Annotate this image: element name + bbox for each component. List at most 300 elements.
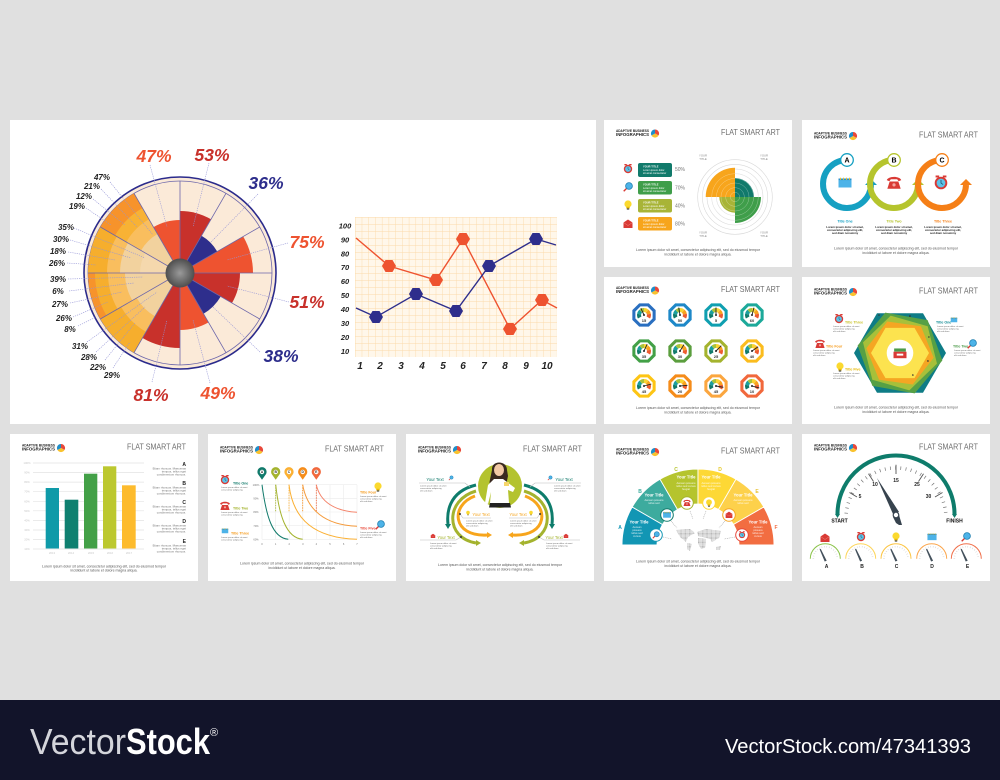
header: INFOGRAPHICS (814, 290, 847, 296)
caption: Lorem ipsum dolor sit amet, consectetur adipiscing elit, sed do eiusmod tempor (636, 560, 761, 564)
radial chart small labels: 18% (50, 247, 66, 256)
footer bar (0, 700, 1000, 780)
radial chart: TITLE (699, 234, 707, 238)
bars: 90% (24, 471, 30, 475)
segment text: tellus sed (738, 501, 749, 505)
bars: 2015 (88, 551, 95, 555)
title rows: YOUR TITLE (643, 182, 659, 186)
header (814, 442, 978, 452)
segment text: Aenean posuere (733, 498, 753, 502)
step titles and text: Lorem ipsum dolor sit amet, (924, 225, 962, 229)
arc C: C (939, 158, 945, 164)
right callouts: elit sed diam (360, 536, 372, 539)
callout text (420, 484, 581, 550)
caption: Lorem ipsum dolor sit amet, consectetur adipiscing elit, sed do eiusmod tempor (636, 248, 761, 252)
panel: octagon gauges (604, 277, 792, 424)
header: FLAT SMART ART (721, 127, 780, 137)
gauge grid: 60 (750, 318, 755, 323)
legend: tempus, tellus eget (162, 526, 186, 530)
header: FLAT SMART ART (127, 442, 186, 452)
header (22, 442, 186, 452)
radial chart small labels: 47% (93, 173, 110, 182)
bars: 2013 (49, 551, 56, 555)
radial chart small labels (48, 173, 120, 380)
caption: incididunt ut labore et dolore magna aliqua. (862, 251, 930, 255)
title rows: Lorem ipsum dolor (643, 168, 665, 172)
step titles and text: sed diam nonummy (881, 231, 908, 235)
curve chart: 7 (356, 542, 358, 546)
header: FLAT SMART ART (325, 444, 384, 454)
caption: incididunt ut labore et dolore magna aliqua. (268, 566, 336, 570)
header: INFOGRAPHICS (616, 289, 649, 294)
legend: tempus, tellus eget (162, 470, 186, 474)
segment text: tellus sed (753, 531, 764, 535)
title rows: 40% (675, 204, 686, 210)
legend: condimentum rhoncus. (157, 492, 186, 496)
radial chart small labels: 19% (69, 202, 85, 211)
curve chart: 90% (253, 496, 259, 500)
x axis labels: 10 (541, 361, 553, 372)
y axis labels: 50 (341, 291, 350, 300)
radial chart: YOUR (760, 154, 768, 158)
header: ADAPTIVE BUSINESS (616, 286, 649, 290)
callout text: Lorem ipsum dolor sit amet (466, 520, 493, 522)
segment text: cursus (754, 534, 763, 538)
bars (23, 461, 144, 555)
segment text: cursus (633, 534, 642, 538)
callout connectors (419, 483, 581, 540)
segment titles: Your Title (645, 492, 664, 498)
segment letters: F (774, 525, 778, 531)
segment text: Aenean (633, 525, 642, 529)
main gauge: 15 (893, 478, 899, 484)
title rows: YOUR TITLE (643, 164, 659, 168)
left callouts: elit sed diam (833, 330, 845, 333)
radial chart small labels: 31% (72, 342, 88, 351)
header: INFOGRAPHICS (814, 134, 847, 140)
legend: Etiam rhoncus. Maecenas (153, 486, 187, 490)
radial chart small labels: 30% (53, 235, 69, 244)
presenter portrait (478, 462, 522, 508)
curve chart: 60% (253, 538, 259, 542)
left callouts: Title Three (845, 320, 863, 324)
hexagon stack (851, 309, 949, 397)
callout labels: Your Text (426, 477, 444, 482)
arc C (918, 154, 972, 208)
left arcs (445, 485, 492, 546)
legend: B (182, 481, 186, 487)
segment text: Aenean posuere (676, 481, 696, 485)
location pins: C (288, 470, 291, 474)
radial chart small labels: 28% (80, 353, 97, 362)
y axis labels: 80 (341, 250, 350, 258)
title rows: Lorem ipsum dolor (643, 204, 665, 208)
callout text: consectetur adipiscing (510, 522, 532, 525)
radial chart small labels: 8% (64, 325, 76, 334)
gauge grid: 45 (642, 389, 647, 394)
right callouts: elit sed diam (360, 500, 372, 503)
step titles and text: Title One (837, 220, 853, 224)
segment letters (618, 467, 778, 531)
location pins: D (301, 470, 304, 474)
y axis labels: 100 (339, 222, 352, 230)
bars: 60% (24, 499, 30, 503)
small gauge icons (820, 532, 970, 542)
panel: A B C circular arrows (802, 120, 990, 267)
legend: A (182, 462, 186, 468)
header: INFOGRAPHICS (616, 450, 649, 456)
curve chart: 6 (343, 542, 345, 546)
caption (438, 563, 563, 572)
curve chart (253, 483, 358, 546)
legend (153, 462, 187, 554)
radial chart small labels: 26% (55, 314, 72, 323)
curve chart: 0 (261, 542, 263, 546)
segment text: posuere (753, 528, 763, 532)
legend: D (182, 519, 186, 525)
bars: 100% (23, 461, 31, 465)
y axis labels: 30 (341, 319, 350, 328)
segment titles: Your Title (677, 474, 696, 480)
x axis labels: 4 (418, 361, 425, 372)
left callouts (813, 314, 863, 380)
x axis labels (357, 361, 553, 372)
callout text: Lorem ipsum dolor sit amet (430, 542, 457, 545)
title rows: YOUR TITLE (643, 218, 659, 222)
step titles and text: consectetur adipiscing elit, (827, 228, 863, 232)
header: FLAT SMART ART (523, 444, 582, 454)
left callouts: consectetur adipiscing (833, 374, 855, 378)
radial chart main labels: 49% (199, 383, 236, 403)
legend: condimentum rhoncus. (157, 530, 186, 534)
right callouts (936, 317, 981, 357)
main gauge: 10 (872, 482, 878, 488)
header: ADAPTIVE BUSINESS (814, 288, 847, 292)
radial chart small labels: 21% (83, 182, 100, 191)
location pins: B (274, 470, 277, 474)
location pins: E (315, 470, 318, 474)
header: INFOGRAPHICS (814, 446, 847, 452)
right callouts (360, 482, 387, 539)
gauge grid: 15 (642, 318, 647, 323)
gauge grid: 25 (714, 354, 719, 359)
callout text: Lorem ipsum dolor sit amet (546, 542, 573, 545)
left callouts: Lorem ipsum dolor sit amet (833, 325, 860, 328)
title rows: 80% (675, 222, 686, 228)
arc B: B (891, 158, 897, 164)
VectorStock logo: ® (210, 727, 218, 739)
right callouts: Title Two (953, 344, 969, 348)
arc A (823, 154, 877, 208)
hexagon stack: E (912, 373, 914, 377)
right callouts: Title One (936, 320, 951, 324)
bars: 70% (24, 490, 30, 494)
legend: Etiam rhoncus. Maecenas (153, 504, 187, 508)
segment text: Aenean posuere (701, 481, 721, 485)
step titles and text: Title Two (886, 220, 902, 224)
small gauge letters: D (930, 564, 934, 570)
right callouts: consectetur adipiscing (360, 498, 382, 500)
callout text: Lorem ipsum dolor sit amet (510, 520, 537, 522)
right callouts: elit sed diam (954, 354, 966, 357)
y axis labels (339, 222, 352, 356)
radial chart main labels: 38% (263, 346, 299, 366)
panel: radial and line charts (10, 120, 596, 424)
segment text: tellus sed (632, 531, 643, 535)
caption: Lorem ipsum dolor sit amet, consectetur adipiscing elit, sed do eiusmod tempor (834, 406, 959, 410)
main gauge: 5 (859, 494, 862, 500)
right callouts: Lorem ipsum dolor sit amet (360, 495, 387, 498)
segment titles (630, 474, 768, 524)
title rows: 70% (675, 186, 686, 192)
left callouts: Lorem ipsum dolor sit amet (813, 349, 840, 352)
panel: decay curves (208, 434, 396, 581)
panel: presenter with arcs (406, 434, 594, 581)
step titles and text: Lorem ipsum dolor sit amet, (826, 225, 864, 229)
main gauge: START (831, 518, 848, 524)
radial chart main labels: 53% (194, 145, 230, 165)
curve chart: 4 (316, 542, 318, 546)
x axis labels: 9 (523, 361, 529, 372)
radial chart small labels: 35% (58, 223, 74, 232)
caption: incididunt ut labore et dolore magna aliqua. (466, 568, 534, 572)
semicircle segments (622, 469, 774, 545)
callout text: consectetur adipiscing (420, 487, 442, 490)
line chart (339, 217, 557, 372)
radial chart main labels: 36% (248, 173, 284, 193)
left callouts: Title Four (826, 344, 843, 348)
title rows: Lorem ipsum dolor (643, 186, 665, 190)
left callouts: Title Three (231, 532, 249, 536)
bars: 10% (24, 547, 30, 551)
panel: speedometer (802, 434, 990, 581)
right callouts: Lorem ipsum dolor sit amet (954, 349, 981, 352)
header: INFOGRAPHICS (22, 446, 55, 452)
right callouts: consectetur adipiscing (360, 534, 382, 536)
title rows: YOUR TITLE (643, 200, 659, 204)
left callouts: Title Five (845, 368, 861, 372)
radial chart small labels: 29% (103, 371, 120, 380)
legend: E (183, 539, 187, 545)
legend: condimentum rhoncus. (157, 472, 186, 476)
left callouts: Lorem ipsum dolor sit amet (221, 536, 248, 539)
gauge grid: 30 (678, 354, 683, 359)
small gauge letters (825, 564, 970, 570)
step titles and text: Lorem ipsum dolor sit amet, (875, 225, 913, 229)
bars: 20% (24, 538, 30, 542)
segment text: tellus sed cursus (701, 484, 721, 488)
radial chart main labels: 75% (289, 232, 325, 252)
title rows: sit amet consectetur (643, 225, 666, 229)
segment letters: C (674, 467, 678, 473)
hexagon stack: B (909, 314, 912, 318)
y axis labels: 90 (341, 236, 350, 244)
bars: 30% (24, 528, 30, 532)
bars: 2016 (107, 551, 114, 555)
callout labels (426, 477, 573, 540)
y axis labels: 40 (340, 305, 350, 314)
legend: tempus, tellus eget (162, 488, 186, 492)
radial chart main labels (133, 145, 325, 405)
legend: C (182, 500, 186, 506)
caption (834, 246, 959, 255)
title rows: sit amet consectetur (643, 171, 666, 175)
panel: radial progress (604, 120, 792, 267)
y axis labels: 20 (340, 333, 350, 342)
x axis labels: 7 (481, 361, 487, 372)
red data points (382, 233, 549, 335)
radial chart: TITLE (760, 234, 768, 238)
location pins (257, 467, 321, 480)
arc A: A (844, 158, 850, 164)
small gauges (810, 544, 981, 562)
header (418, 444, 582, 454)
callout text: consectetur adipiscing (466, 522, 488, 525)
caption (42, 564, 167, 572)
icon badges (650, 497, 748, 541)
callout text: elit sed diam (554, 490, 566, 492)
header (814, 286, 978, 296)
radial chart main labels: 51% (289, 292, 325, 312)
caption (636, 248, 761, 256)
header: INFOGRAPHICS (418, 448, 451, 454)
header: ADAPTIVE BUSINESS (616, 448, 649, 452)
segment text: posuere (632, 528, 642, 532)
left callouts: Lorem ipsum dolor sit amet (221, 511, 248, 514)
segment text: Aenean (754, 525, 763, 529)
x axis labels: 2 (376, 361, 383, 372)
stock id: VectorStock.com/47341393 (725, 736, 971, 758)
radial chart small labels: 26% (48, 259, 65, 268)
radial chart: YOUR (760, 230, 768, 234)
curve chart: 5 (329, 542, 331, 546)
segment letters: D (718, 467, 722, 473)
x axis labels: 5 (440, 361, 446, 372)
left callouts: elit sed diam (833, 377, 845, 380)
right callouts: consectetur adipiscing (954, 352, 976, 354)
segment text (632, 481, 764, 538)
caption: Lorem ipsum dolor sit amet, consectetur adipiscing elit, sed do eiusmod tempor (438, 563, 563, 567)
left callouts: Lorem ipsum dolor sit amet (833, 372, 860, 375)
header (616, 284, 780, 295)
title rows: sit amet consectetur (643, 189, 666, 193)
dotted connectors to map (663, 511, 735, 539)
header: FLAT SMART ART (721, 446, 780, 456)
curve chart: 80% (253, 510, 259, 514)
y axis labels: 60 (341, 277, 350, 286)
callout text: consectetur adipiscing (546, 544, 568, 548)
curve chart: 3 (302, 542, 304, 546)
right callouts: Title Four (360, 490, 377, 494)
bars: 2017 (126, 551, 133, 555)
curve chart: 70% (253, 524, 259, 528)
segment titles: Your Title (734, 492, 753, 498)
radial chart small labels: 27% (51, 300, 68, 309)
caption (240, 562, 365, 570)
arc B (870, 154, 924, 208)
left callouts (220, 475, 249, 542)
step titles and text (826, 220, 962, 235)
y axis labels: 10 (341, 347, 350, 356)
step titles and text: sed diam nonummy (832, 231, 859, 235)
segment letters: E (755, 489, 759, 495)
world map (676, 529, 721, 551)
left callouts: Title One (233, 482, 248, 486)
gauge grid: 20 (678, 389, 683, 394)
legend: Etiam rhoncus. Maecenas (153, 524, 187, 528)
caption (636, 560, 761, 568)
caption: incididunt ut labore et dolore magna aliqua. (862, 410, 930, 414)
bars: 40% (24, 518, 30, 522)
main gauge (831, 456, 963, 525)
legend: Etiam rhoncus. Maecenas (153, 544, 187, 548)
caption: Lorem ipsum dolor sit amet, consectetur adipiscing elit, sed do eiusmod tempor (834, 246, 959, 250)
callout text: elit sed diam (510, 524, 522, 528)
panel: nested hexagon (802, 277, 990, 424)
VectorStock logo: VectorStock (30, 721, 224, 762)
segment text: feugiat (682, 487, 690, 491)
left callouts: consectetur adipiscing (221, 488, 243, 492)
hexagon stack: A (878, 313, 881, 317)
curve chart: 100% (253, 483, 260, 487)
segment titles: Your Title (630, 520, 649, 524)
small gauge letters: A (825, 564, 829, 570)
x axis labels: 8 (502, 361, 508, 372)
gauge grid: 45 (714, 389, 719, 394)
callout labels: Your Text (437, 535, 455, 540)
header: ADAPTIVE BUSINESS (616, 129, 649, 133)
right callouts: consectetur adipiscing (937, 328, 959, 330)
radial chart small labels: 6% (52, 287, 64, 296)
location pins: A (261, 470, 264, 474)
x axis labels: 3 (398, 361, 404, 372)
step titles and text: Title Three (934, 220, 952, 224)
hexagon stack: C (928, 335, 931, 339)
callout text: elit sed diam (430, 547, 442, 550)
callout labels: Your Text (545, 535, 563, 540)
radial chart small labels: 39% (50, 275, 66, 284)
header: INFOGRAPHICS (220, 448, 253, 454)
header (220, 444, 384, 454)
x axis labels: 1 (357, 361, 363, 372)
callout text: elit sed diam (466, 524, 478, 528)
callout labels: Your Text (555, 477, 573, 482)
small gauge letters: E (966, 564, 970, 570)
header: ADAPTIVE BUSINESS (814, 132, 847, 136)
segment text: tellus sed (649, 501, 660, 505)
callout icons (431, 476, 568, 538)
icons (838, 176, 947, 189)
radial chart small labels: 12% (76, 192, 92, 201)
blue data points (369, 233, 543, 323)
header: ADAPTIVE BUSINESS (814, 444, 847, 448)
radial chart (698, 154, 772, 238)
radial chart small labels: 22% (89, 363, 106, 372)
radial chart (67, 163, 289, 383)
caption: incididunt ut labore et dolore magna aliqua. (664, 564, 732, 568)
caption: Lorem ipsum dolor sit amet, consectetur adipiscing elit, sed do eiusmod tempor (42, 564, 167, 568)
caption (636, 406, 761, 414)
callout text: elit sed diam (546, 547, 558, 550)
radial chart main labels: 47% (135, 146, 172, 166)
radial chart: YOUR (699, 154, 707, 158)
gauge grid: 35 (642, 354, 647, 359)
gauge grid: 10 (750, 389, 755, 394)
caption (834, 406, 959, 414)
header: FLAT SMART ART (919, 130, 978, 140)
caption: incididunt ut labore et dolore magna aliqua. (70, 568, 138, 572)
header (616, 127, 780, 138)
